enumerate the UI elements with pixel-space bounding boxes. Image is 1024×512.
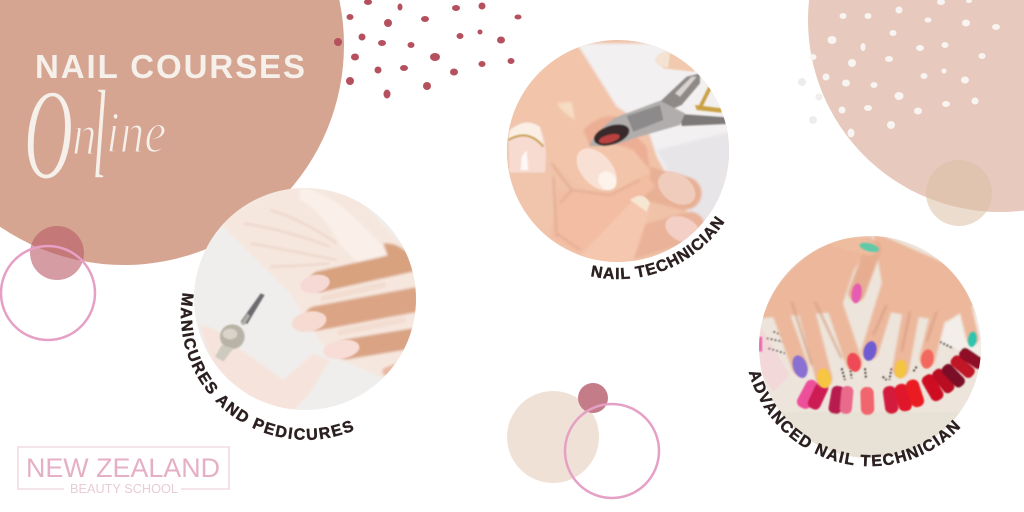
title: Online script: l — [92, 66, 107, 207]
title: Online script: n — [72, 102, 97, 167]
logo: New Zealand Beauty School: BEAUTY SCHOOL — [70, 482, 178, 496]
photo: nail technician with cuticle nippers — [507, 40, 729, 262]
photo: manicure with drill — [194, 188, 416, 410]
logo: New Zealand Beauty School: NEW ZEALAND — [26, 453, 220, 483]
decoration: dark rose dot scatter — [334, 0, 522, 98]
decoration: translucent beige circle top right — [926, 160, 992, 226]
title: Nail Courses: NAIL COURSES — [35, 48, 305, 85]
decoration: pink ring bottom centre — [565, 404, 659, 498]
decoration: rose dot left — [30, 226, 84, 280]
label: Advanced Nail Technician: ADVANCED NAIL TECHNICIAN — [748, 372, 960, 466]
swatch fan — [795, 346, 986, 415]
decoration: pink ring left — [1, 246, 95, 340]
decoration: rose dot bottom centre — [578, 383, 608, 413]
label: Manicures and Pedicures: MANICURES AND PEDICURES — [180, 293, 354, 440]
decoration: beige circle bottom centre — [507, 391, 599, 483]
label: Nail Technician: NAIL TECHNICIAN — [591, 216, 724, 280]
decoration: white dot scatter — [798, 0, 1000, 138]
panel: large rose circle — [0, 0, 344, 265]
photo: colourful nails over swatches — [759, 236, 981, 458]
title: Online script — [24, 64, 166, 207]
title: Online script: ine — [106, 100, 166, 165]
panel: pale top-right circle — [808, 0, 1024, 212]
title: Online script: O — [24, 64, 73, 207]
logo: New Zealand Beauty School — [18, 447, 229, 496]
